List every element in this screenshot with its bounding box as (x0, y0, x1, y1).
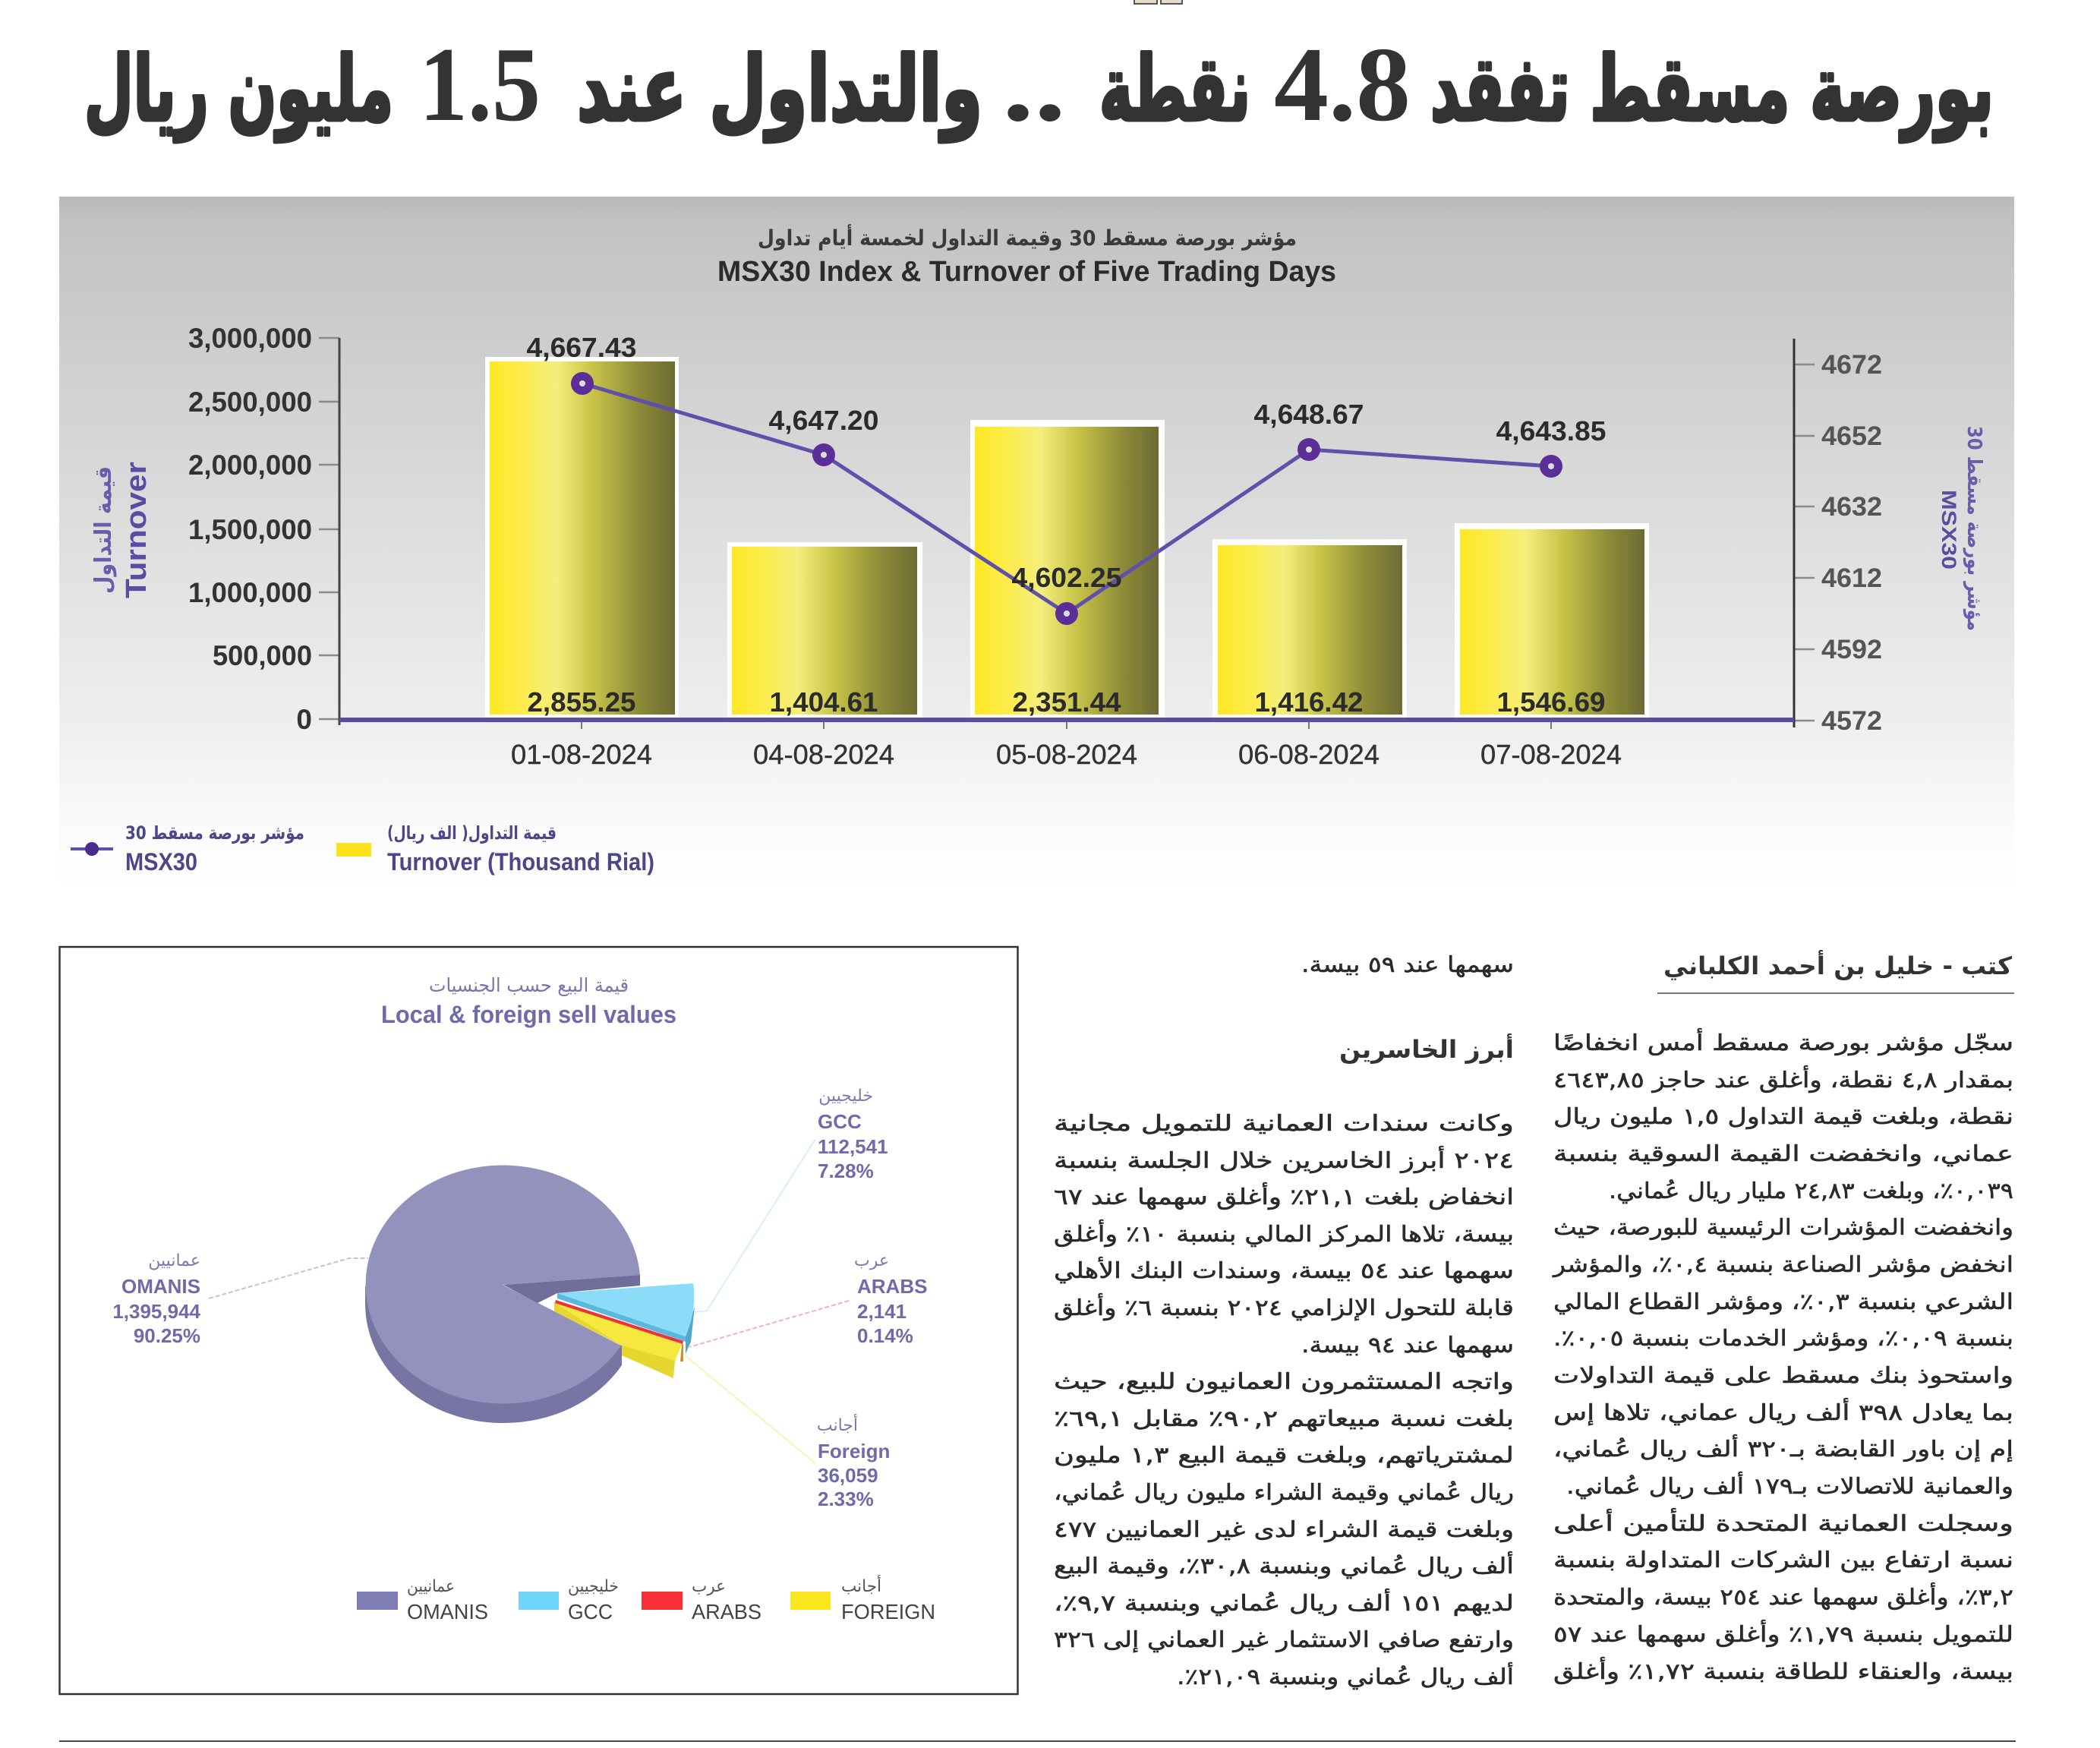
turnover value labels: 2,855.25 (527, 686, 636, 718)
body text: market summary: ٣,٢٪، وأغلق سهمها عند ٢٥٤ بيسة، والمتحدة (1553, 1582, 2013, 1610)
headline (84, 26, 1994, 144)
legend: Arabs (642, 1577, 761, 1623)
subheading: top losers: أبرز الخاسرين (1339, 1033, 1514, 1064)
right axis (1794, 339, 1882, 736)
pie slice: Arabs (555, 1300, 683, 1344)
body text: market summary: بمقدار ٤,٨ نقطة، وأغلق عند حاجز ٤٦٤٣,٨٥ (1553, 1065, 2013, 1093)
legend: MSX30: مؤشر بورصة مسقط 30 (125, 822, 304, 844)
leader lines (209, 1139, 849, 1463)
panel: MSX30 index and turnover chart (59, 197, 2014, 891)
body text: losers and investors: وارتفع صافي الاستثمار غير العماني إلى ٣٢٦ (1054, 1627, 1514, 1653)
label: foreign: أجانب (817, 1414, 858, 1435)
body text: market summary: نقطة، وبلغت قيمة التداول ١,٥ مليون ريال (1553, 1103, 2013, 1129)
body text: losers and investors: بلغت نسبة مبيعاتهم ٩٠,٢٪ مقابل ٦٩,١٪ (1054, 1406, 1514, 1432)
body text: losers and investors: سهمها عند ٩٤ بيسة. (1301, 1332, 1514, 1358)
label: GCC: خليجيين (818, 1087, 873, 1106)
headline: والتداول عند (577, 36, 982, 142)
body text: market summary: واستحوذ بنك مسقط على قيمة التداولات (1553, 1362, 2013, 1388)
left axis title: Turnover (121, 462, 153, 598)
chart title: MSX30 Index & Turnover of Five Trading Days (717, 256, 1336, 288)
turnover value labels: 1,404.61 (770, 686, 878, 718)
body text: losers and investors: ٢٠٢٤ أبرز الخاسرين خلال الجلسة بنسبة (1054, 1145, 1514, 1173)
pie title: قيمة البيع حسب الجنسيات (429, 974, 629, 997)
label: foreign: Foreign (818, 1440, 890, 1462)
left axis: 3,000,000 (188, 323, 312, 354)
left axis: 500,000 (213, 640, 312, 671)
right axis title (1938, 426, 1985, 631)
label: foreign: 2.33% (818, 1488, 874, 1510)
right axis: 4632 (1821, 492, 1882, 522)
right axis title: MSX30 (1938, 490, 1960, 570)
middle article column (1054, 951, 1514, 1690)
body text: market summary: انخفض مؤشر الصناعة بنسبة ٠,٤٪، والمؤشر (1552, 1251, 2013, 1277)
legend: Omanis: OMANIS (407, 1600, 488, 1623)
body text: market summary: بما يعادل ٣٩٨ ألف ريال عماني، تلاها إس (1553, 1397, 2013, 1426)
body text: market summary: للتمويل بنسبة ١,٧٩٪ وأغلق سهمها عند ٥٧ (1553, 1619, 2013, 1647)
right axis: 4612 (1821, 563, 1882, 593)
body text: market summary: والعمانية للاتصالات بـ١٧٩ ألف ريال عُماني. (1566, 1471, 2013, 1500)
label: Arabs: 0.14% (857, 1324, 913, 1347)
body text: losers and investors: لديهم ١٥١ ألف ريال عُماني وبنسبة ٩,٧٪، (1054, 1588, 1514, 1617)
legend: Arabs: ARABS (692, 1600, 761, 1623)
byline: كتب - خليل بن أحمد الكلباني (1663, 950, 2012, 980)
label: Omanis (112, 1251, 201, 1347)
bars: turnover (485, 357, 1649, 718)
panel: local and foreign sell values pie chart (59, 947, 1017, 1694)
label: GCC: GCC (818, 1110, 862, 1133)
legend: foreign: أجانب (841, 1575, 881, 1596)
legend: turnover: Turnover (Thousand Rial) (387, 848, 654, 876)
left axis: 1,500,000 (188, 514, 312, 545)
body text: losers and investors: ألف ريال عُماني وبنسبة ٢١,٠٩٪. (1177, 1661, 1514, 1690)
body text: market summary: سجّل مؤشر بورصة مسقط أمس انخفاضًا (1553, 1027, 2013, 1055)
label: Arabs (854, 1251, 927, 1347)
index value labels: 4,643.85 (1496, 415, 1607, 446)
closing line of previous paragraph: سهمها عند ٥٩ بيسة. (1301, 951, 1514, 977)
x axis baseline and date labels: 01-08-2024 (511, 739, 652, 770)
body text: market summary: ٠,٠٣٩٪، وبلغت ٢٤,٨٣ مليار ريال عُماني. (1609, 1178, 2013, 1204)
body text: losers and investors: ريال عُماني وقيمة الشراء مليون ريال عُماني، (1054, 1479, 1514, 1506)
index value labels (527, 332, 1607, 593)
body text: market summary: بنسبة ٠,٠٩٪، ومؤشر الخدمات بنسبة ٠,٠٥٪. (1553, 1325, 2013, 1351)
right axis: 4592 (1821, 635, 1882, 664)
label: Arabs: 2,141 (857, 1300, 907, 1323)
turnover value labels: 2,351.44 (1013, 686, 1121, 718)
index value labels: 4,667.43 (527, 332, 636, 363)
body text: losers and investors: سهمها عند ٥٤ بيسة، وسندات البنك الأهلي (1054, 1256, 1514, 1284)
body text: losers and investors: بيسة، تلاها المركز المالي بنسبة ١٠٪ وأغلق (1054, 1219, 1514, 1248)
right axis: 4652 (1821, 421, 1882, 451)
body text: losers and investors: لمشترياتهم، وبلغت قيمة البيع ١,٣ مليون (1054, 1442, 1514, 1469)
legend: turnover (336, 822, 654, 876)
body text: losers and investors: انخفاض بلغت ٢١,١٪ وأغلق سهمها عند ٦٧ (1054, 1182, 1514, 1210)
body text: market summary: وسجلت العمانية المتحدة للتأمين أعلى (1553, 1507, 2013, 1536)
left axis title (90, 462, 153, 598)
label: Omanis: OMANIS (121, 1275, 200, 1298)
turnover value labels: 1,416.42 (1254, 686, 1364, 718)
label: GCC: 112,541 (818, 1135, 888, 1158)
label: Omanis: 1,395,944 (112, 1300, 201, 1323)
turnover value labels: 1,546.69 (1497, 686, 1605, 718)
pie title: Local & foreign sell values (381, 1001, 676, 1028)
left axis: 2,500,000 (188, 387, 312, 418)
left axis: 1,000,000 (188, 577, 312, 608)
top clipped marks (1134, 0, 1182, 4)
right axis: 4672 (1821, 350, 1882, 380)
chart title: مؤشر بورصة مسقط 30 وقيمة التداول لخمسة أيام تداول (758, 224, 1297, 251)
x axis baseline and date labels: 07-08-2024 (1480, 739, 1622, 770)
chart title (717, 224, 1336, 288)
body text: market summary: نسبة ارتفاع بين الشركات المتداولة بنسبة (1553, 1547, 2013, 1573)
headline: مليون ريال (84, 36, 393, 142)
pie slice: Omanis (365, 1166, 640, 1423)
headline: 4.8 (1274, 26, 1411, 144)
legend: Omanis (357, 1577, 488, 1623)
body text: losers and investors: ألف ريال عُماني وبنسبة ٣٠,٨٪، وقيمة البيع (1054, 1551, 1514, 1579)
legend: GCC: GCC (568, 1600, 613, 1623)
legend: GCC (519, 1577, 619, 1623)
pie title (381, 974, 676, 1028)
headline: .. (1002, 26, 1066, 144)
body text: market summary: عماني، وانخفضت القيمة السوقية بنسبة (1553, 1141, 2013, 1167)
x axis baseline and date labels: 04-08-2024 (753, 739, 894, 770)
legend: Arabs: عرب (692, 1577, 726, 1596)
legend: MSX30 (71, 822, 304, 876)
x axis baseline and date labels: 05-08-2024 (996, 739, 1137, 770)
body text: losers and investors: واتجه المستثمرون العمانيون للبيع، حيث (1054, 1368, 1514, 1394)
x axis baseline and date labels (339, 718, 1794, 770)
legend: foreign: FOREIGN (841, 1600, 935, 1623)
bottom page rule (59, 1740, 2016, 1742)
body text: losers and investors (1054, 1110, 1514, 1690)
body text: losers and investors: قابلة للتحول الإلزامي ٢٠٢٤ بنسبة ٦٪ وأغلق (1054, 1292, 1514, 1321)
label: Omanis: عمانيين (148, 1251, 200, 1270)
right axis: 4572 (1821, 706, 1882, 736)
line: MSX30 index (571, 372, 1562, 625)
label: foreign (817, 1414, 890, 1510)
body text: losers and investors: وبلغت قيمة الشراء لدى غير العمانيين ٤٧٧ (1054, 1516, 1514, 1542)
index value labels: 4,602.25 (1011, 562, 1122, 593)
right article column (1552, 950, 2014, 1684)
label: Arabs: ARABS (857, 1275, 927, 1298)
pie slice: foreign (554, 1302, 683, 1378)
index value labels: 4,648.67 (1254, 399, 1364, 430)
label: GCC: 7.28% (818, 1160, 874, 1182)
left axis (188, 323, 339, 735)
legend: MSX30: MSX30 (125, 848, 197, 876)
label: foreign: 36,059 (818, 1464, 878, 1487)
left axis title: قيمة التداول (90, 466, 117, 594)
label: GCC (818, 1087, 888, 1182)
headline: نقطة (1099, 36, 1250, 141)
pie slice: GCC (557, 1283, 695, 1354)
left axis: 0 (296, 704, 312, 735)
label: Omanis: 90.25% (134, 1324, 200, 1347)
legend: GCC: خليجيين (568, 1577, 619, 1596)
left axis: 2,000,000 (188, 450, 312, 481)
index value labels: 4,647.20 (768, 405, 879, 436)
legend: Omanis: عمانيين (407, 1577, 455, 1596)
body text: losers and investors: وكانت سندات العمانية للتمويل مجانية (1054, 1110, 1514, 1136)
body text: market summary: بيسة، والعنقاء للطاقة بنسبة ١,٧٢٪ وأغلق (1553, 1656, 2013, 1684)
body text: market summary (1552, 1027, 2013, 1684)
headline: 1.5 (419, 26, 541, 144)
legend: turnover: قيمة التداول( الف ريال) (387, 822, 557, 844)
body text: market summary: وانخفضت المؤشرات الرئيسية للبورصة، حيث (1553, 1214, 2013, 1240)
right axis title: مؤشر بورصة مسقط 30 (1963, 426, 1985, 631)
legend: foreign (790, 1575, 935, 1623)
label: Arabs: عرب (854, 1251, 889, 1270)
turnover value labels (527, 686, 1605, 718)
body text: market summary: الشرعي بنسبة ٠,٣٪، ومؤشر القطاع المالي (1553, 1289, 2013, 1315)
x axis baseline and date labels: 06-08-2024 (1238, 739, 1380, 770)
body text: market summary: إم إن باور القابضة بـ٣٢٠ ألف ريال عُماني، (1553, 1434, 2013, 1462)
